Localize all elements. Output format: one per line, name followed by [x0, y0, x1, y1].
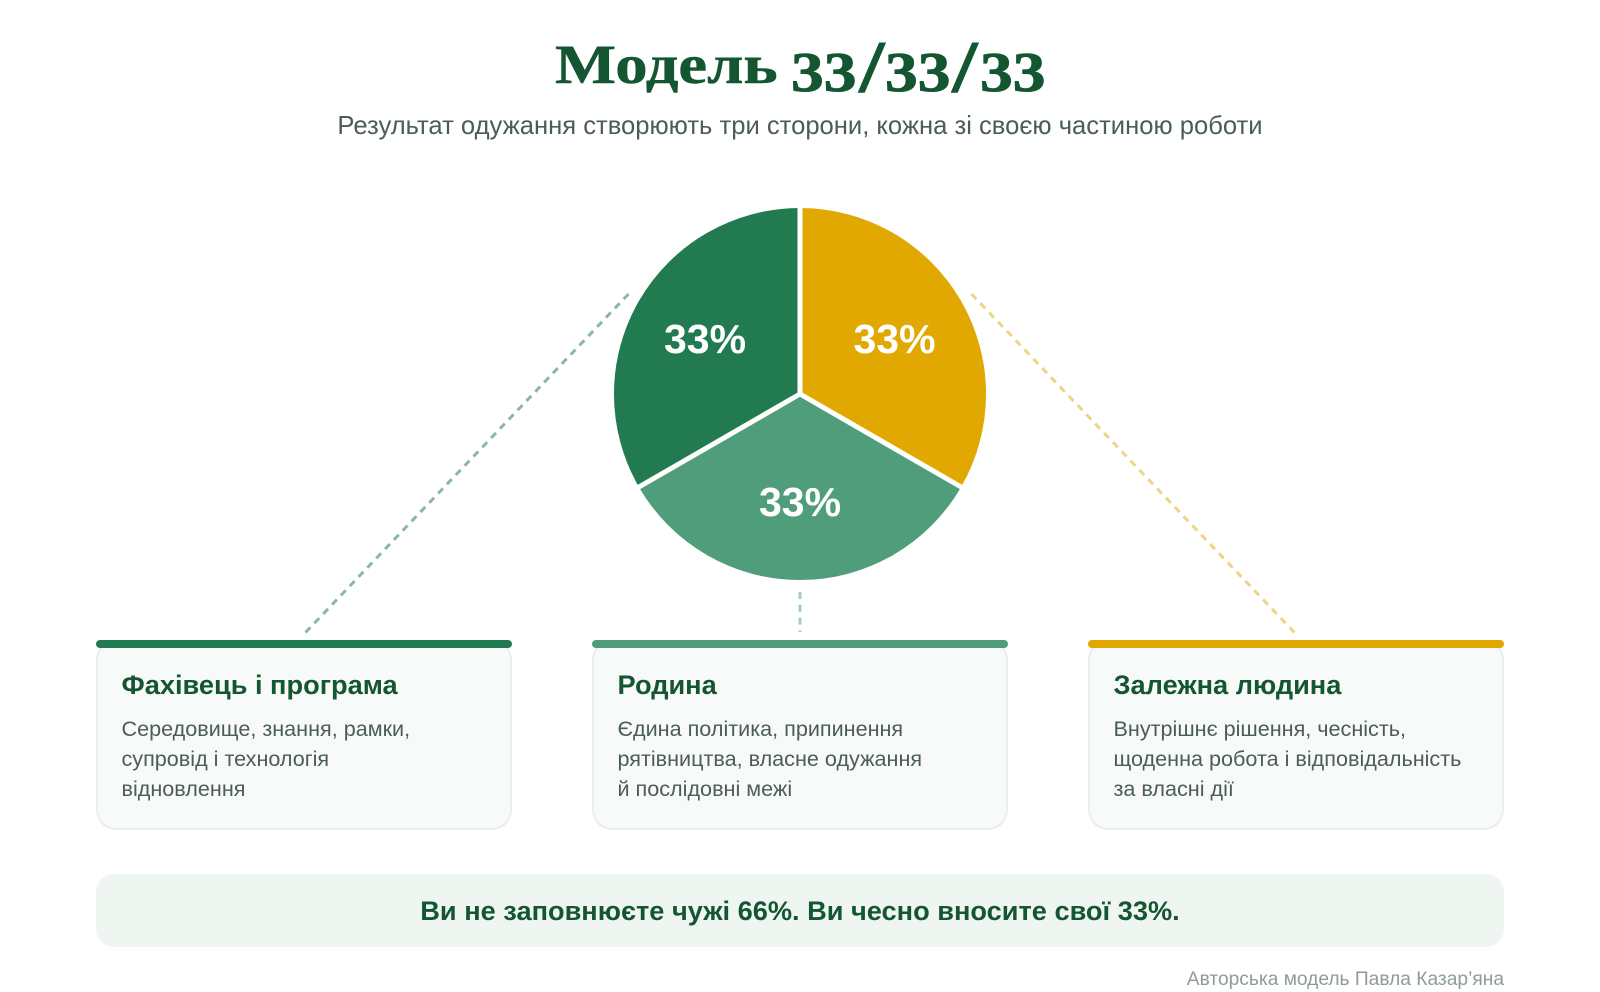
card: specialist and program	[96, 640, 512, 830]
card text	[1114, 716, 1461, 801]
card text: щоденна робота і відповідальність	[1114, 746, 1461, 771]
card text: Внутрішнє рішення, чесність,	[1114, 716, 1406, 741]
card: dependent person	[1088, 640, 1504, 830]
title	[555, 26, 1046, 108]
card heading: Родина	[618, 668, 717, 700]
card text: супровід і технологія	[122, 746, 329, 771]
connector: center	[798, 592, 802, 632]
card bar	[592, 640, 1008, 648]
subtitle: Результат одужання створюють три сторони, кожна зі своєю частиною роботи	[337, 112, 1263, 140]
card text: й послідовні межі	[618, 776, 792, 801]
card heading: Залежна людина	[1114, 668, 1341, 700]
connector: right	[972, 294, 1295, 633]
card text: Середовище, знання, рамки,	[122, 716, 410, 741]
card text: рятівництва, власне одужання	[618, 746, 922, 771]
banner: Ви не заповнюєте чужі 66%. Ви чесно вносите свої 33%.	[420, 894, 1180, 926]
title: 33	[791, 42, 857, 104]
title: Модель	[555, 34, 778, 95]
pie dividers	[638, 207, 962, 488]
card text	[618, 716, 922, 801]
card text: за власні дії	[1114, 776, 1234, 801]
card: family	[592, 640, 1008, 830]
card bar	[96, 640, 512, 648]
pie slice: gold	[800, 208, 986, 487]
title: /	[859, 26, 885, 108]
title: 33	[885, 42, 951, 104]
pie slice: light green	[639, 394, 961, 580]
card text: Єдина політика, припинення	[618, 716, 903, 741]
label: 33% right: 33%	[853, 316, 936, 362]
label: 33% left: 33%	[664, 316, 746, 362]
title: 33	[980, 42, 1046, 104]
card text	[122, 716, 410, 801]
title: /	[952, 26, 978, 108]
banner	[96, 874, 1504, 947]
pie slice: dark green	[614, 208, 800, 487]
card text: відновлення	[122, 776, 245, 801]
footer credit: Авторська модель Павла Казар’яна	[1187, 969, 1504, 990]
label: 33% bottom: 33%	[759, 479, 841, 525]
connector: left	[305, 294, 628, 633]
card heading: Фахівець і програма	[122, 668, 398, 700]
card bar	[1088, 640, 1504, 648]
